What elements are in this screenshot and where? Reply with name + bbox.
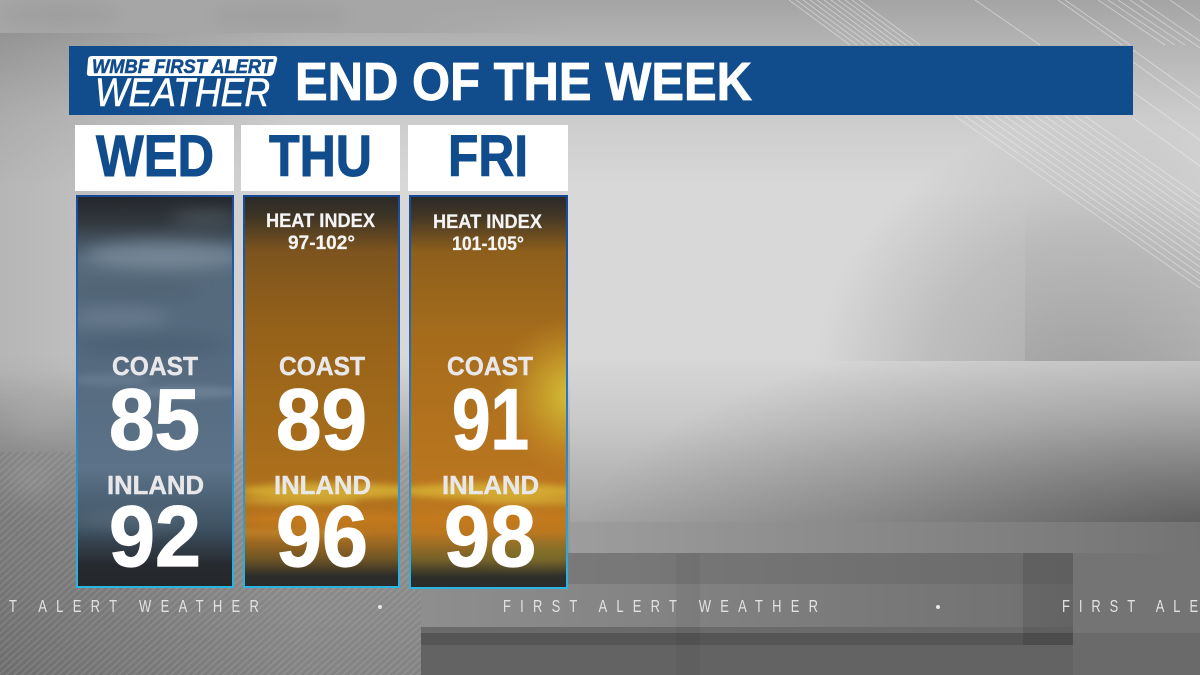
heat index note: Friday: [433, 212, 542, 255]
heat index note: Friday: 101-105°: [452, 234, 524, 255]
Thursday coast temperature: 89: [276, 372, 367, 468]
Thursday coast temperature: COAST: [279, 351, 365, 381]
Friday coast temperature: [447, 351, 533, 468]
Friday inland temperature: INLAND: [442, 470, 539, 500]
heat index note: Friday: HEAT INDEX: [433, 212, 542, 233]
ticker strip: FIRST ALE: [1062, 597, 1198, 617]
logo: WMBF First Alert Weather: WEATHER: [95, 71, 270, 115]
day column: Friday: [408, 125, 568, 589]
ticker strip: FIRST ALERT WEATHER: [503, 597, 818, 617]
Friday coast temperature: COAST: [447, 351, 533, 381]
ticker strip: T ALERT WEATHER: [9, 597, 259, 617]
ticker strip: [9, 597, 1198, 617]
Wednesday inland temperature: INLAND: [107, 470, 204, 500]
logo: WMBF First Alert Weather: WMBF FIRST ALERT: [92, 57, 273, 78]
Wednesday coast temperature: 85: [109, 372, 200, 468]
forecast card: Wednesday: [76, 195, 234, 588]
forecast card: Friday: [409, 195, 568, 589]
day column: Thursday: [241, 125, 400, 588]
logo: WMBF First Alert Weather: [87, 56, 277, 115]
Friday inland temperature: 98: [444, 489, 536, 585]
forecast card: Thursday: [243, 195, 400, 588]
heat index note: Thursday: [266, 211, 375, 254]
title banner: [69, 46, 1133, 115]
Friday coast temperature: 91: [452, 372, 529, 468]
day column: Wednesday: [75, 125, 234, 588]
day header: FRI: [408, 124, 568, 191]
day header: WED: WED: [96, 124, 214, 189]
day header: THU: THU: [269, 124, 372, 189]
Wednesday inland temperature: 92: [109, 489, 201, 585]
heat index note: Thursday: 97-102°: [288, 233, 355, 254]
heat index note: Thursday: HEAT INDEX: [266, 211, 375, 232]
Thursday inland temperature: INLAND: [274, 470, 371, 500]
Thursday inland temperature: 96: [276, 489, 368, 585]
title text: END OF THE WEEK: [295, 52, 752, 112]
day header: FRI: FRI: [448, 124, 528, 189]
Wednesday coast temperature: COAST: [112, 351, 198, 381]
